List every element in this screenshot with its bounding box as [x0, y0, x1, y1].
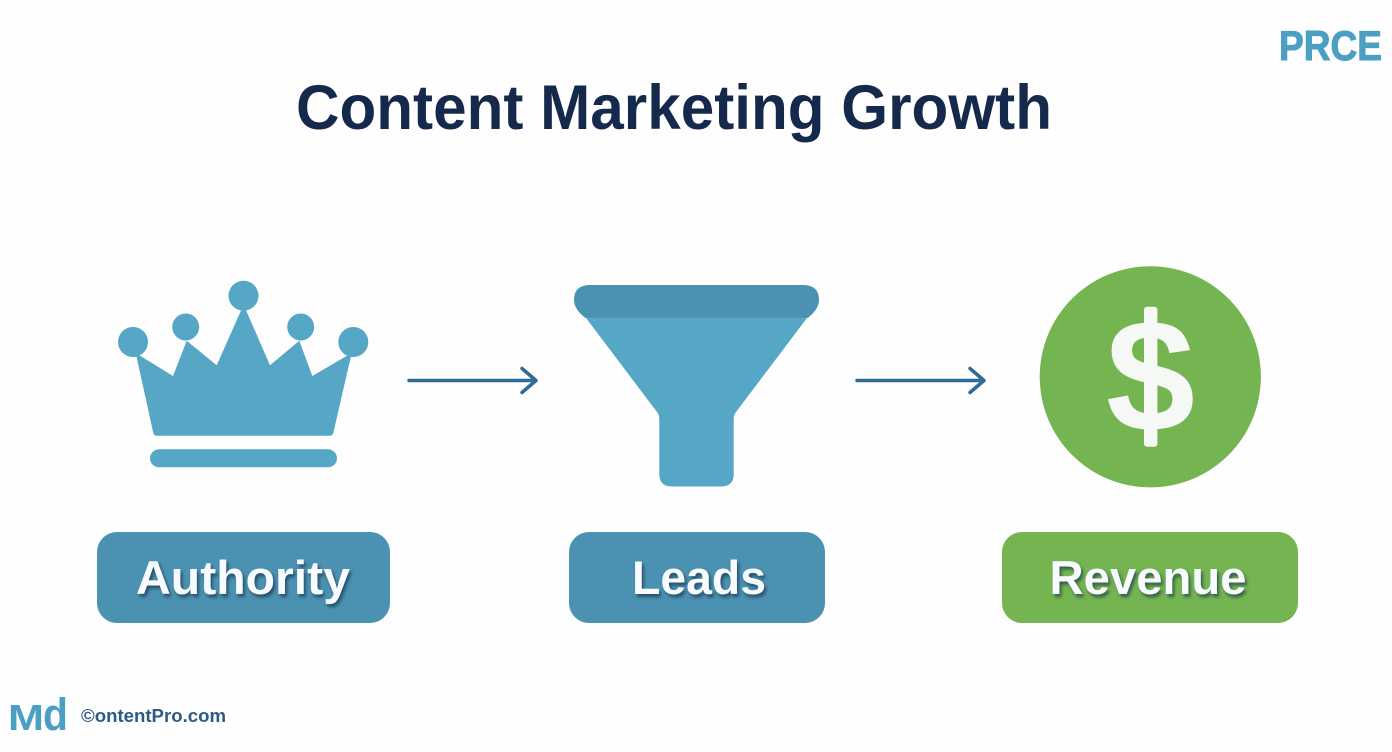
label: Leads: Leads	[632, 551, 766, 604]
icon: dollar coin	[1040, 266, 1261, 487]
arrow: authority to leads	[409, 368, 536, 392]
icon: funnel	[574, 285, 819, 486]
label: Revenue	[1002, 532, 1298, 623]
arrow: leads to revenue	[857, 368, 984, 392]
icon: dollar coin: $	[1106, 286, 1195, 465]
label: Authority	[97, 532, 390, 623]
icon: crown	[118, 281, 368, 467]
footer logo: Md	[8, 689, 68, 740]
footer logo: Md: d	[43, 689, 68, 740]
footer text: website: ©ontentPro.com	[81, 706, 226, 726]
title: Content Marketing Growth	[296, 73, 1052, 143]
footer logo: Md: M	[8, 697, 44, 738]
label: Authority: Authority	[136, 551, 350, 604]
logo: PRCE: PRCE	[1279, 22, 1382, 69]
label: Leads	[569, 532, 825, 623]
label: Revenue: Revenue	[1050, 551, 1246, 604]
